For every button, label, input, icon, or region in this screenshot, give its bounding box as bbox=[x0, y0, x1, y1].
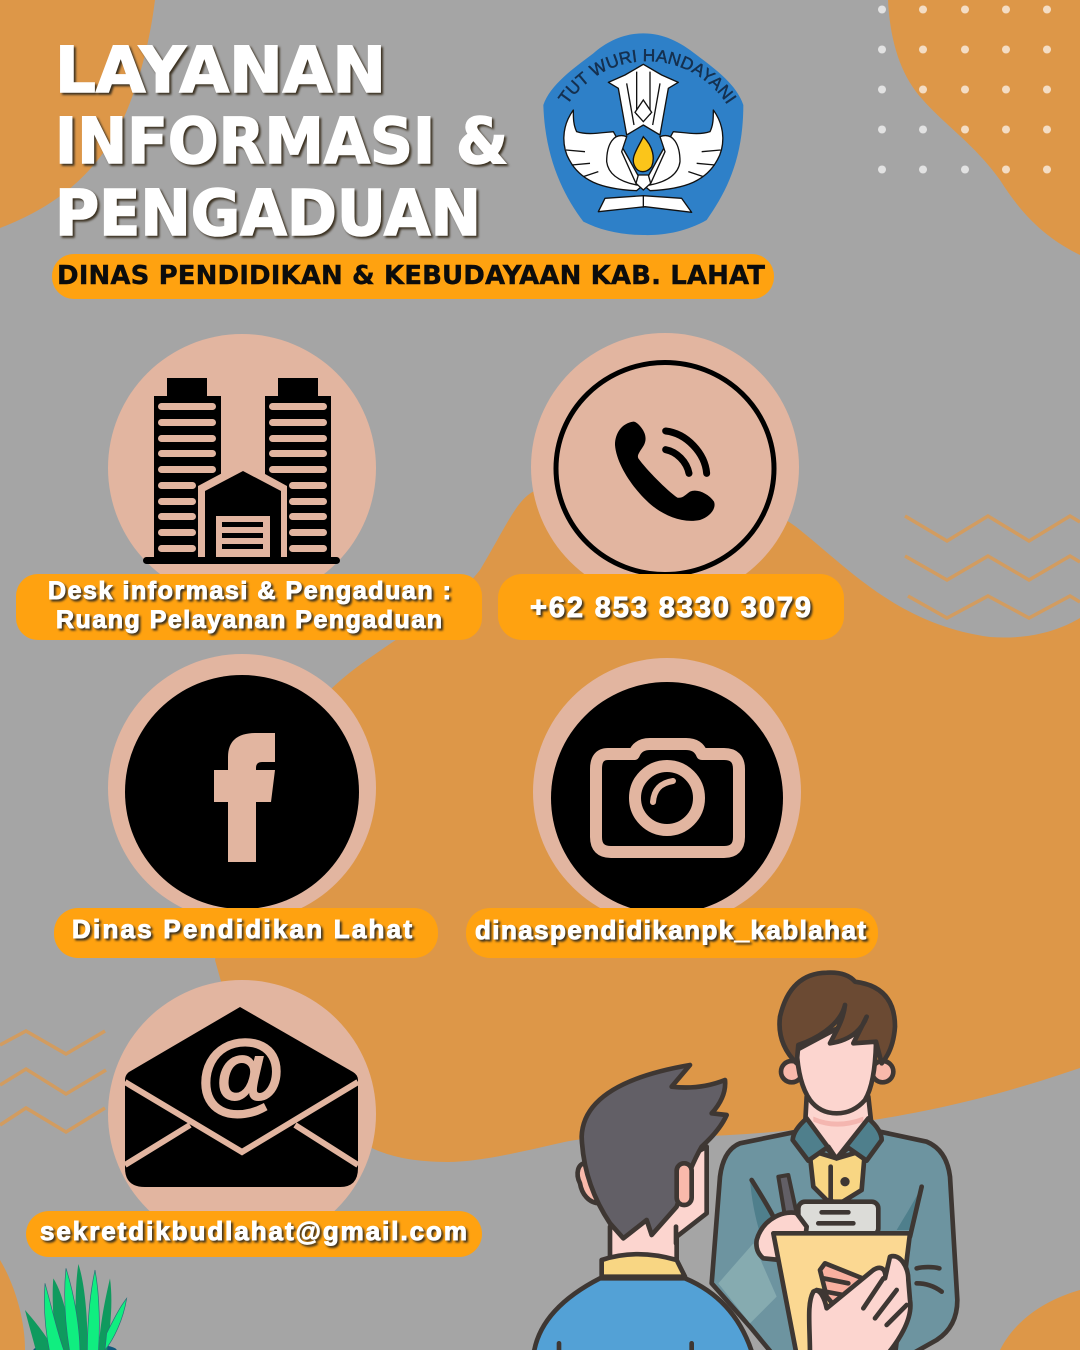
icon: envelope: @ bbox=[197, 1023, 285, 1123]
label pill: email bbox=[26, 1211, 482, 1257]
label pill: facebook: Dinas Pendidikan Lahat bbox=[72, 914, 412, 944]
plant bbox=[25, 1264, 127, 1350]
illustration: two people at consultation bbox=[533, 973, 957, 1350]
man facing viewer bbox=[712, 973, 957, 1350]
logo: Tut Wuri Handayani: TUT WURI HANDAYANI bbox=[557, 49, 737, 104]
panel: facebook bbox=[54, 654, 438, 958]
label pill: instagram: dinaspendidikanpk_kablahat bbox=[475, 915, 866, 945]
label pill: phone number: +62 853 8330 3079 bbox=[530, 592, 811, 624]
man seen from behind bbox=[533, 1065, 753, 1350]
dot grid bbox=[878, 6, 1051, 174]
label pill: email: sekretdikbudlahat@gmail.com bbox=[40, 1216, 467, 1246]
title: PENGADUAN bbox=[55, 177, 481, 250]
icon: facebook bbox=[108, 654, 376, 922]
icon: envelope bbox=[108, 980, 376, 1248]
label pill: phone number bbox=[498, 574, 844, 640]
icon: office buildings bbox=[108, 334, 376, 602]
label pill: desk informasi bbox=[16, 574, 482, 640]
logo: Tut Wuri Handayani bbox=[543, 33, 744, 236]
title: INFORMASI & bbox=[55, 105, 508, 178]
label pill: desk informasi: Ruang Pelayanan Pengaduan bbox=[56, 606, 442, 634]
label pill: instagram bbox=[466, 908, 878, 958]
panel: instagram bbox=[466, 658, 878, 958]
title: LAYANAN bbox=[55, 34, 386, 107]
panel: desk informasi bbox=[16, 334, 482, 640]
icon: camera bbox=[533, 658, 801, 926]
icon: phone bbox=[531, 333, 799, 601]
title bbox=[55, 34, 508, 250]
label pill: desk informasi: Desk informasi & Pengaduan : bbox=[48, 577, 451, 605]
label pill: facebook bbox=[54, 908, 438, 958]
decorative zigzags bbox=[0, 516, 1080, 1132]
subtitle pill bbox=[52, 254, 774, 299]
panel: phone bbox=[498, 333, 844, 640]
panel: email bbox=[26, 980, 482, 1257]
subtitle pill: DINAS PENDIDIKAN & KEBUDAYAAN KAB. LAHAT bbox=[57, 261, 765, 291]
